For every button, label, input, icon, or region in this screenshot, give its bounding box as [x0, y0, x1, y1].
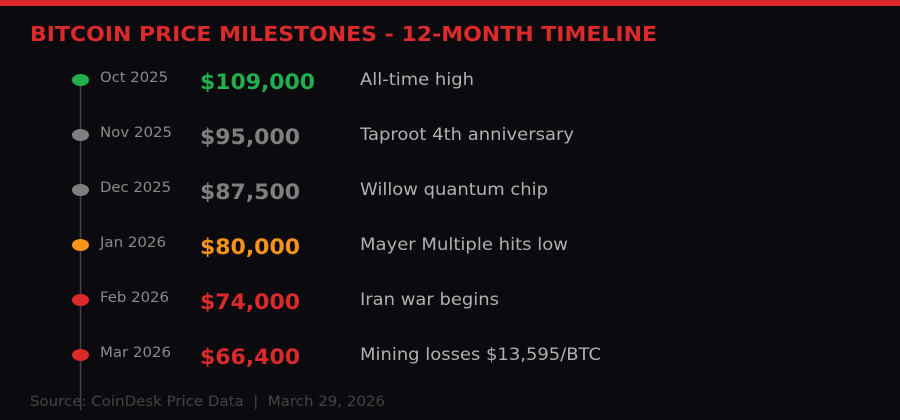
milestone: Mar 2026: Mining losses $13,595/BTC — [360, 345, 601, 365]
milestone: Feb 2026: Feb 2026 — [100, 290, 169, 306]
source footer: Source: CoinDesk Price Data | March 29, 2026 — [30, 394, 385, 410]
milestone: Feb 2026: Iran war begins — [360, 290, 499, 310]
milestone: Jan 2026 — [72, 235, 568, 259]
milestone: Oct 2025 — [72, 70, 474, 94]
milestone: Dec 2025: Willow quantum chip — [360, 180, 548, 200]
milestone: Dec 2025: Dec 2025 — [100, 180, 171, 196]
milestone: Nov 2025: $95,000 — [200, 125, 300, 149]
timeline line — [80, 80, 82, 410]
milestone: Mar 2026 — [72, 345, 601, 369]
milestone: Mar 2026: Mar 2026 — [100, 345, 171, 361]
milestone: Nov 2025 — [72, 125, 574, 149]
milestone: Jan 2026: Mayer Multiple hits low — [360, 235, 568, 255]
milestone: Mar 2026: $66,400 — [200, 345, 300, 369]
milestone: Jan 2026: $80,000 — [200, 235, 300, 259]
milestone: Nov 2025: Nov 2025 — [100, 125, 172, 141]
top accent bar — [0, 0, 900, 6]
title: BITCOIN PRICE MILESTONES - 12-MONTH TIMELINE — [30, 22, 657, 46]
milestone: Oct 2025: All-time high — [360, 70, 474, 90]
milestone: Nov 2025: Taproot 4th anniversary — [359, 125, 574, 145]
milestone: Oct 2025: Oct 2025 — [100, 70, 168, 86]
milestone: Feb 2026: $74,000 — [200, 290, 300, 314]
milestone: Dec 2025 — [72, 180, 548, 204]
milestone: Oct 2025: $109,000 — [200, 70, 315, 94]
milestone: Feb 2026 — [72, 290, 499, 314]
milestone: Dec 2025: $87,500 — [200, 180, 300, 204]
milestone: Jan 2026: Jan 2026 — [99, 235, 166, 251]
